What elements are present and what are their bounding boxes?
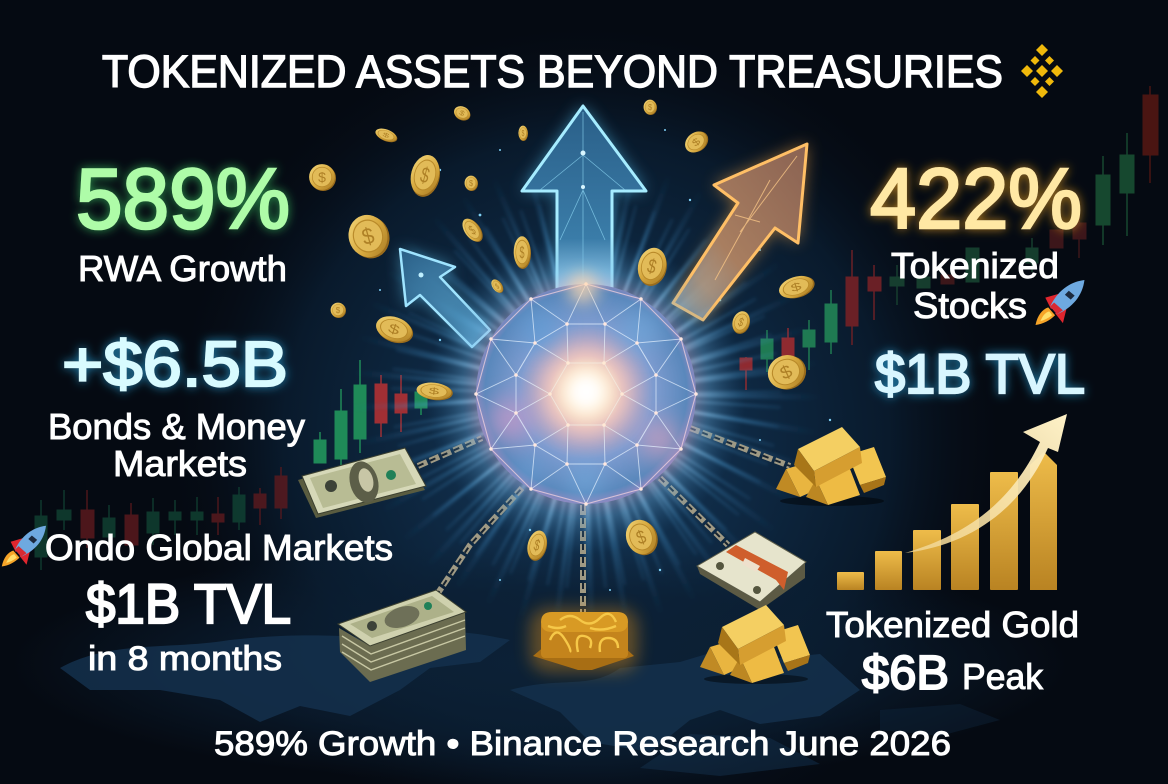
stat: Ondo Global Markets: Ondo Global Markets <box>45 527 393 568</box>
banded cash stack <box>697 532 806 610</box>
central glowing orb network <box>426 234 746 554</box>
icon: rocket left <box>2 526 46 566</box>
arrow: large blue centre <box>522 106 646 295</box>
stat: tokenized gold <box>826 604 1079 700</box>
world map silhouette <box>60 632 1000 776</box>
stat: 589% RWA growth: 589% <box>76 152 290 247</box>
stat: +$6.5B bonds and money markets: Bonds & Money <box>48 406 305 447</box>
arrow: orange up-right <box>673 144 807 320</box>
stat: +$6.5B bonds and money markets <box>48 328 305 484</box>
stat: tokenized gold: Peak <box>962 656 1044 697</box>
icon: rocket right <box>1036 280 1084 325</box>
energy rays <box>436 244 736 544</box>
dollar bills: lower left stack <box>338 590 466 682</box>
arrow: small blue up-left <box>400 249 490 347</box>
stat: +$6.5B bonds and money markets: +$6.5B <box>62 328 288 400</box>
stat: +$6.5B bonds and money markets: Markets <box>113 443 247 484</box>
gold bars: upper right <box>776 427 886 506</box>
stat: Ondo Global Markets: $1B TVL <box>86 572 291 635</box>
stat: 422% tokenized stocks <box>870 152 1085 405</box>
stat: tokenized gold: Tokenized Gold <box>826 604 1079 645</box>
floating gold coins <box>309 100 817 563</box>
candlestick chart: left <box>35 360 427 570</box>
stat: Ondo Global Markets: in 8 months <box>88 640 282 678</box>
stat: 589% RWA growth: RWA Growth <box>78 248 287 289</box>
gold bar chart with rising arrow <box>837 414 1067 590</box>
stat: 422% tokenized stocks: Stocks <box>913 285 1027 326</box>
stat: 422% tokenized stocks: 422% <box>870 152 1082 247</box>
candlestick chart: right <box>740 86 1158 390</box>
title: TOKENIZED ASSETS BEYOND TREASURIES <box>102 46 1003 97</box>
stat: tokenized gold: $6B <box>862 647 949 700</box>
chains <box>418 428 790 634</box>
dollar bills: upper left <box>298 448 426 518</box>
golden engraved block <box>530 608 638 672</box>
icon: binance logo <box>1021 44 1063 98</box>
stat: 422% tokenized stocks: $1B TVL <box>875 342 1085 405</box>
gold bars: lower <box>700 605 810 684</box>
stat: Ondo Global Markets <box>45 527 393 678</box>
footer: 589% Growth • Binance Research June 2026 <box>214 725 951 763</box>
stat: 422% tokenized stocks: Tokenized <box>891 245 1059 286</box>
stars <box>379 129 831 591</box>
stat: 589% RWA growth <box>76 152 290 289</box>
